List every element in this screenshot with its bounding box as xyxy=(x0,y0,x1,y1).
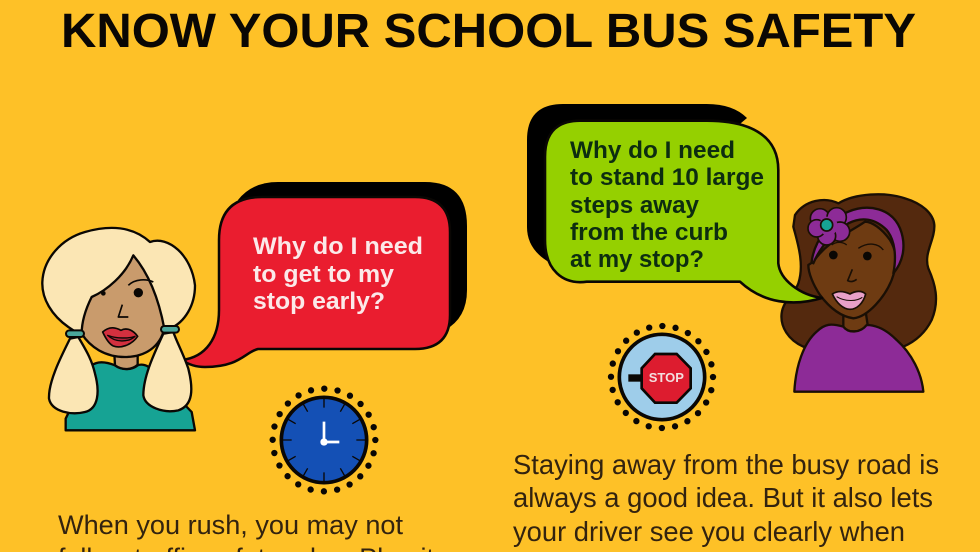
panel: green speech bubble: from the curb xyxy=(570,219,728,246)
icon: stop sign xyxy=(611,326,713,428)
panel: red speech bubble: stop early? xyxy=(253,288,385,315)
panel: green speech bubble: steps away xyxy=(570,192,699,219)
panel: green speech bubble: at my stop? xyxy=(570,246,704,273)
panel: red speech bubble: Why do I need xyxy=(253,233,423,260)
text block: right explanation: Staying away from the busy road is xyxy=(513,449,939,480)
panel: green speech bubble: Why do I need xyxy=(570,137,735,164)
text block: left explanation xyxy=(58,509,434,552)
text block: right explanation: your driver see you clearly when xyxy=(513,516,905,547)
panel: red speech bubble xyxy=(182,182,467,367)
icon: clock xyxy=(273,389,375,491)
panel: green speech bubble: to stand 10 large xyxy=(570,164,764,191)
icon: girl with headband xyxy=(781,194,936,392)
icon: stop sign: STOP xyxy=(649,370,684,385)
title: KNOW YOUR SCHOOL BUS SAFETY xyxy=(61,5,916,58)
icon: blonde girl xyxy=(42,228,195,430)
text block: right explanation xyxy=(513,449,939,547)
text block: right explanation: always a good idea. But it also lets xyxy=(513,482,933,513)
panel: red speech bubble: to get to my xyxy=(253,261,394,288)
text block: left explanation: When you rush, you may not xyxy=(58,509,403,540)
panel: green speech bubble xyxy=(527,104,822,302)
